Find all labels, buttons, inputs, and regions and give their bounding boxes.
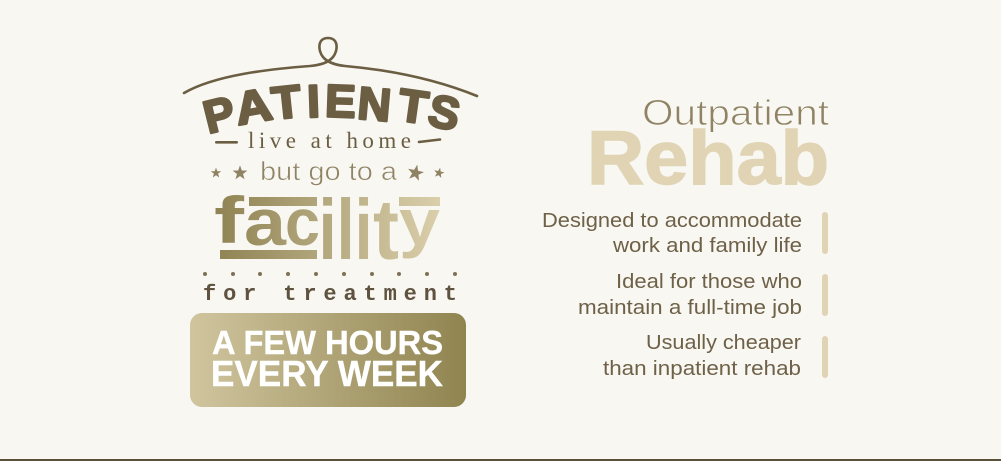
list item 3: than inpatient rehab: [603, 357, 801, 380]
dotted row: [203, 272, 457, 276]
heading: facility: f: [214, 183, 245, 257]
list item 2: Ideal for those who: [616, 270, 802, 293]
heading: PATIENTS: N: [356, 77, 393, 131]
callout: a few hours every week: [190, 313, 466, 407]
text: live at home: live at home: [248, 128, 411, 153]
heading: facility: y: [399, 185, 440, 259]
list bar 2: [822, 274, 828, 316]
heading: facility: [214, 183, 440, 278]
text: but go to a: but go to a: [260, 156, 398, 186]
heading: PATIENTS: A: [231, 79, 276, 135]
list bar 3: [822, 336, 828, 378]
heading: PATIENTS: T: [395, 78, 432, 134]
heading: facility: l: [337, 183, 355, 278]
icons: stars: [211, 163, 445, 181]
heading: facility: i: [319, 183, 337, 278]
heading: PATIENTS: [198, 74, 465, 143]
heading: facility: c: [285, 185, 320, 259]
heading: Outpatient: Outpatient: [642, 92, 829, 133]
list item 1: work and family life: [612, 234, 802, 257]
callout: a few hours every week: EVERY WEEK: [211, 353, 443, 394]
heading: facility: i: [355, 183, 373, 278]
list item 3: Usually cheaper: [646, 331, 801, 354]
heading: PATIENTS: P: [198, 86, 240, 143]
dash left: [215, 141, 238, 144]
panel: patients lettering: [184, 38, 477, 407]
list item 2: maintain a full-time job: [578, 296, 802, 319]
heading: PATIENTS: E: [324, 74, 357, 128]
callout: a few hours every week: A FEW HOURS: [212, 324, 443, 361]
heading: PATIENTS: T: [269, 75, 304, 129]
list item 1: Designed to accommodate: [542, 209, 802, 232]
list item 3: [603, 331, 801, 380]
dash right: [419, 140, 440, 142]
list bar 1: [822, 212, 828, 254]
list item 1: [542, 209, 802, 257]
heading: facility: t: [373, 183, 399, 278]
heading: PATIENTS: I: [306, 75, 321, 127]
panel: outpatient rehab: [542, 92, 829, 380]
heading: facility: a: [244, 185, 287, 259]
text: for treatment: for treatment: [203, 282, 457, 307]
icon: hanger: [184, 38, 477, 96]
list item 2: [578, 270, 802, 319]
heading: PATIENTS: S: [424, 84, 465, 141]
heading: Rehab: Rehab: [587, 116, 829, 201]
